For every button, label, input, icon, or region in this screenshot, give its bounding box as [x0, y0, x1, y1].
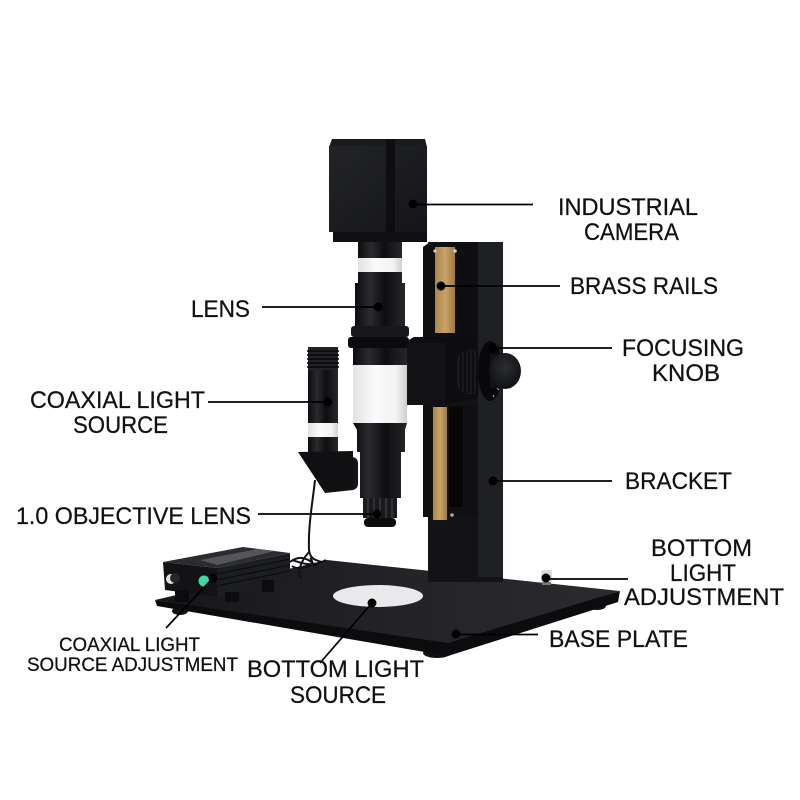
base plate [155, 560, 620, 658]
brass rail: upper [435, 247, 455, 333]
label: bottom light source: BOTTOM LIGHT [247, 656, 424, 683]
label: coaxial light source: COAXIAL LIGHT [30, 387, 205, 414]
leader: objective lens [258, 510, 381, 518]
coaxial light source [298, 347, 358, 493]
cable [290, 480, 326, 578]
label: coaxial light source: SOURCE [73, 412, 168, 439]
carriage block [407, 337, 478, 405]
leader: bottom light adjustment [542, 574, 628, 582]
label: bottom light adjustment: BOTTOM [651, 535, 752, 562]
light disc [333, 585, 423, 607]
carriage lower [423, 405, 476, 517]
leader: coaxial light source [208, 398, 332, 406]
label: base plate: BASE PLATE [549, 626, 688, 653]
adjustment screw [541, 570, 552, 585]
label: bottom light adjustment [624, 535, 784, 611]
leader: focusing knob [489, 344, 612, 352]
label: objective lens: 1.0 OBJECTIVE LENS [16, 503, 251, 530]
label: coaxial light source adjustment: COAXIAL LIGHT [59, 635, 200, 656]
label: coaxial light source [30, 387, 205, 439]
label: bottom light adjustment: ADJUSTMENT [624, 584, 784, 611]
leader: lens [262, 303, 382, 311]
control box [163, 547, 290, 602]
label: industrial camera: CAMERA [584, 219, 679, 246]
label: bracket: BRACKET [625, 468, 732, 495]
label: coaxial light source adjustment: SOURCE ADJUSTMENT [27, 655, 238, 676]
brass rail: lower [433, 407, 447, 520]
label: focusing knob [622, 335, 744, 387]
leader: brass rails [437, 282, 560, 290]
label: focusing knob: FOCUSING [622, 335, 744, 362]
focusing knob [457, 341, 521, 401]
green LED [198, 576, 210, 586]
label: industrial camera [558, 194, 698, 246]
camera [329, 139, 427, 242]
label: bottom light source: SOURCE [290, 682, 386, 709]
label: brass rails: BRASS RAILS [570, 273, 718, 300]
leader: base plate [452, 630, 538, 638]
leader: bottom light source [320, 599, 376, 663]
leader: industrial camera [409, 200, 533, 208]
leader: coaxial adjustment [166, 574, 217, 628]
leader: bracket [489, 477, 612, 485]
label: bottom light source [247, 656, 424, 709]
label: industrial camera: INDUSTRIAL [558, 194, 698, 221]
knob [166, 574, 176, 584]
label: coaxial light source adjustment [27, 635, 238, 676]
stand column [407, 242, 503, 582]
label: bottom light adjustment: LIGHT [670, 560, 736, 587]
leader lines [166, 200, 628, 663]
label: focusing knob: KNOB [652, 360, 720, 387]
label: lens: LENS [191, 296, 250, 323]
lens assembly [348, 242, 409, 527]
